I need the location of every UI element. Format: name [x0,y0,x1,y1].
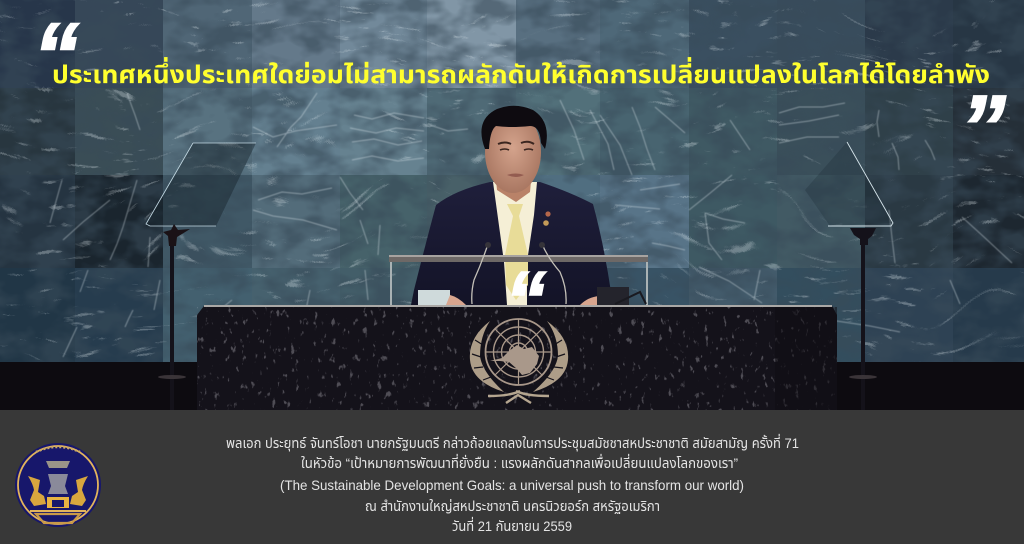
hair [481,106,547,149]
neck [495,170,532,202]
lectern rail and microphones [389,242,648,306]
government seal [15,443,101,527]
right teleprompter [805,142,893,410]
facial features [498,142,534,150]
necktie [505,204,528,300]
headline quote: ประเทศหนึ่งประเทศใดย่อมไม่สามารถผลักดันให้เกิดการเปลี่ยนแปลงในโลกได้โดยลำพัง [52,57,990,89]
UN emblem [470,319,568,403]
caption line 5: วันที่ 21 กันยายน 2559 [452,516,572,534]
opening quotation mark: “ [33,5,79,107]
speaker portrait [411,106,611,305]
caption panel [0,410,1024,544]
left teleprompter [146,143,256,410]
suit jacket [411,182,611,305]
closing quotation mark: ” [960,77,1006,179]
caption line 1: พลเอก ประยุทธ์ จันทร์โอชา นายกรัฐมนตรี กล่าวถ้อยแถลงในการประชุมสมัชชาสหประชาชาติ สมัยสามัญ ครั้งที่ 71 [226,433,799,452]
caption text [226,433,799,534]
lectern [197,305,837,410]
white quotation mark on lectern: “ [505,255,546,346]
head [485,111,541,193]
caption line 2: ในหัวข้อ “เป้าหมายการพัฒนาที่ยั่งยืน : แรงผลักดันสากลเพื่อเปลี่ยนแปลงโลกของเรา” [301,453,738,471]
dark floor strip [0,362,1024,410]
marble wall background [0,0,1024,362]
caption line 4: ณ สำนักงานใหญ่สหประชาชาติ นครนิวยอร์ก สหรัฐอเมริกา [365,498,660,514]
shirt collar [493,182,537,305]
caption line 3: (The Sustainable Development Goals: a universal push to transform our world) [280,477,744,493]
lapel pins [543,211,551,226]
